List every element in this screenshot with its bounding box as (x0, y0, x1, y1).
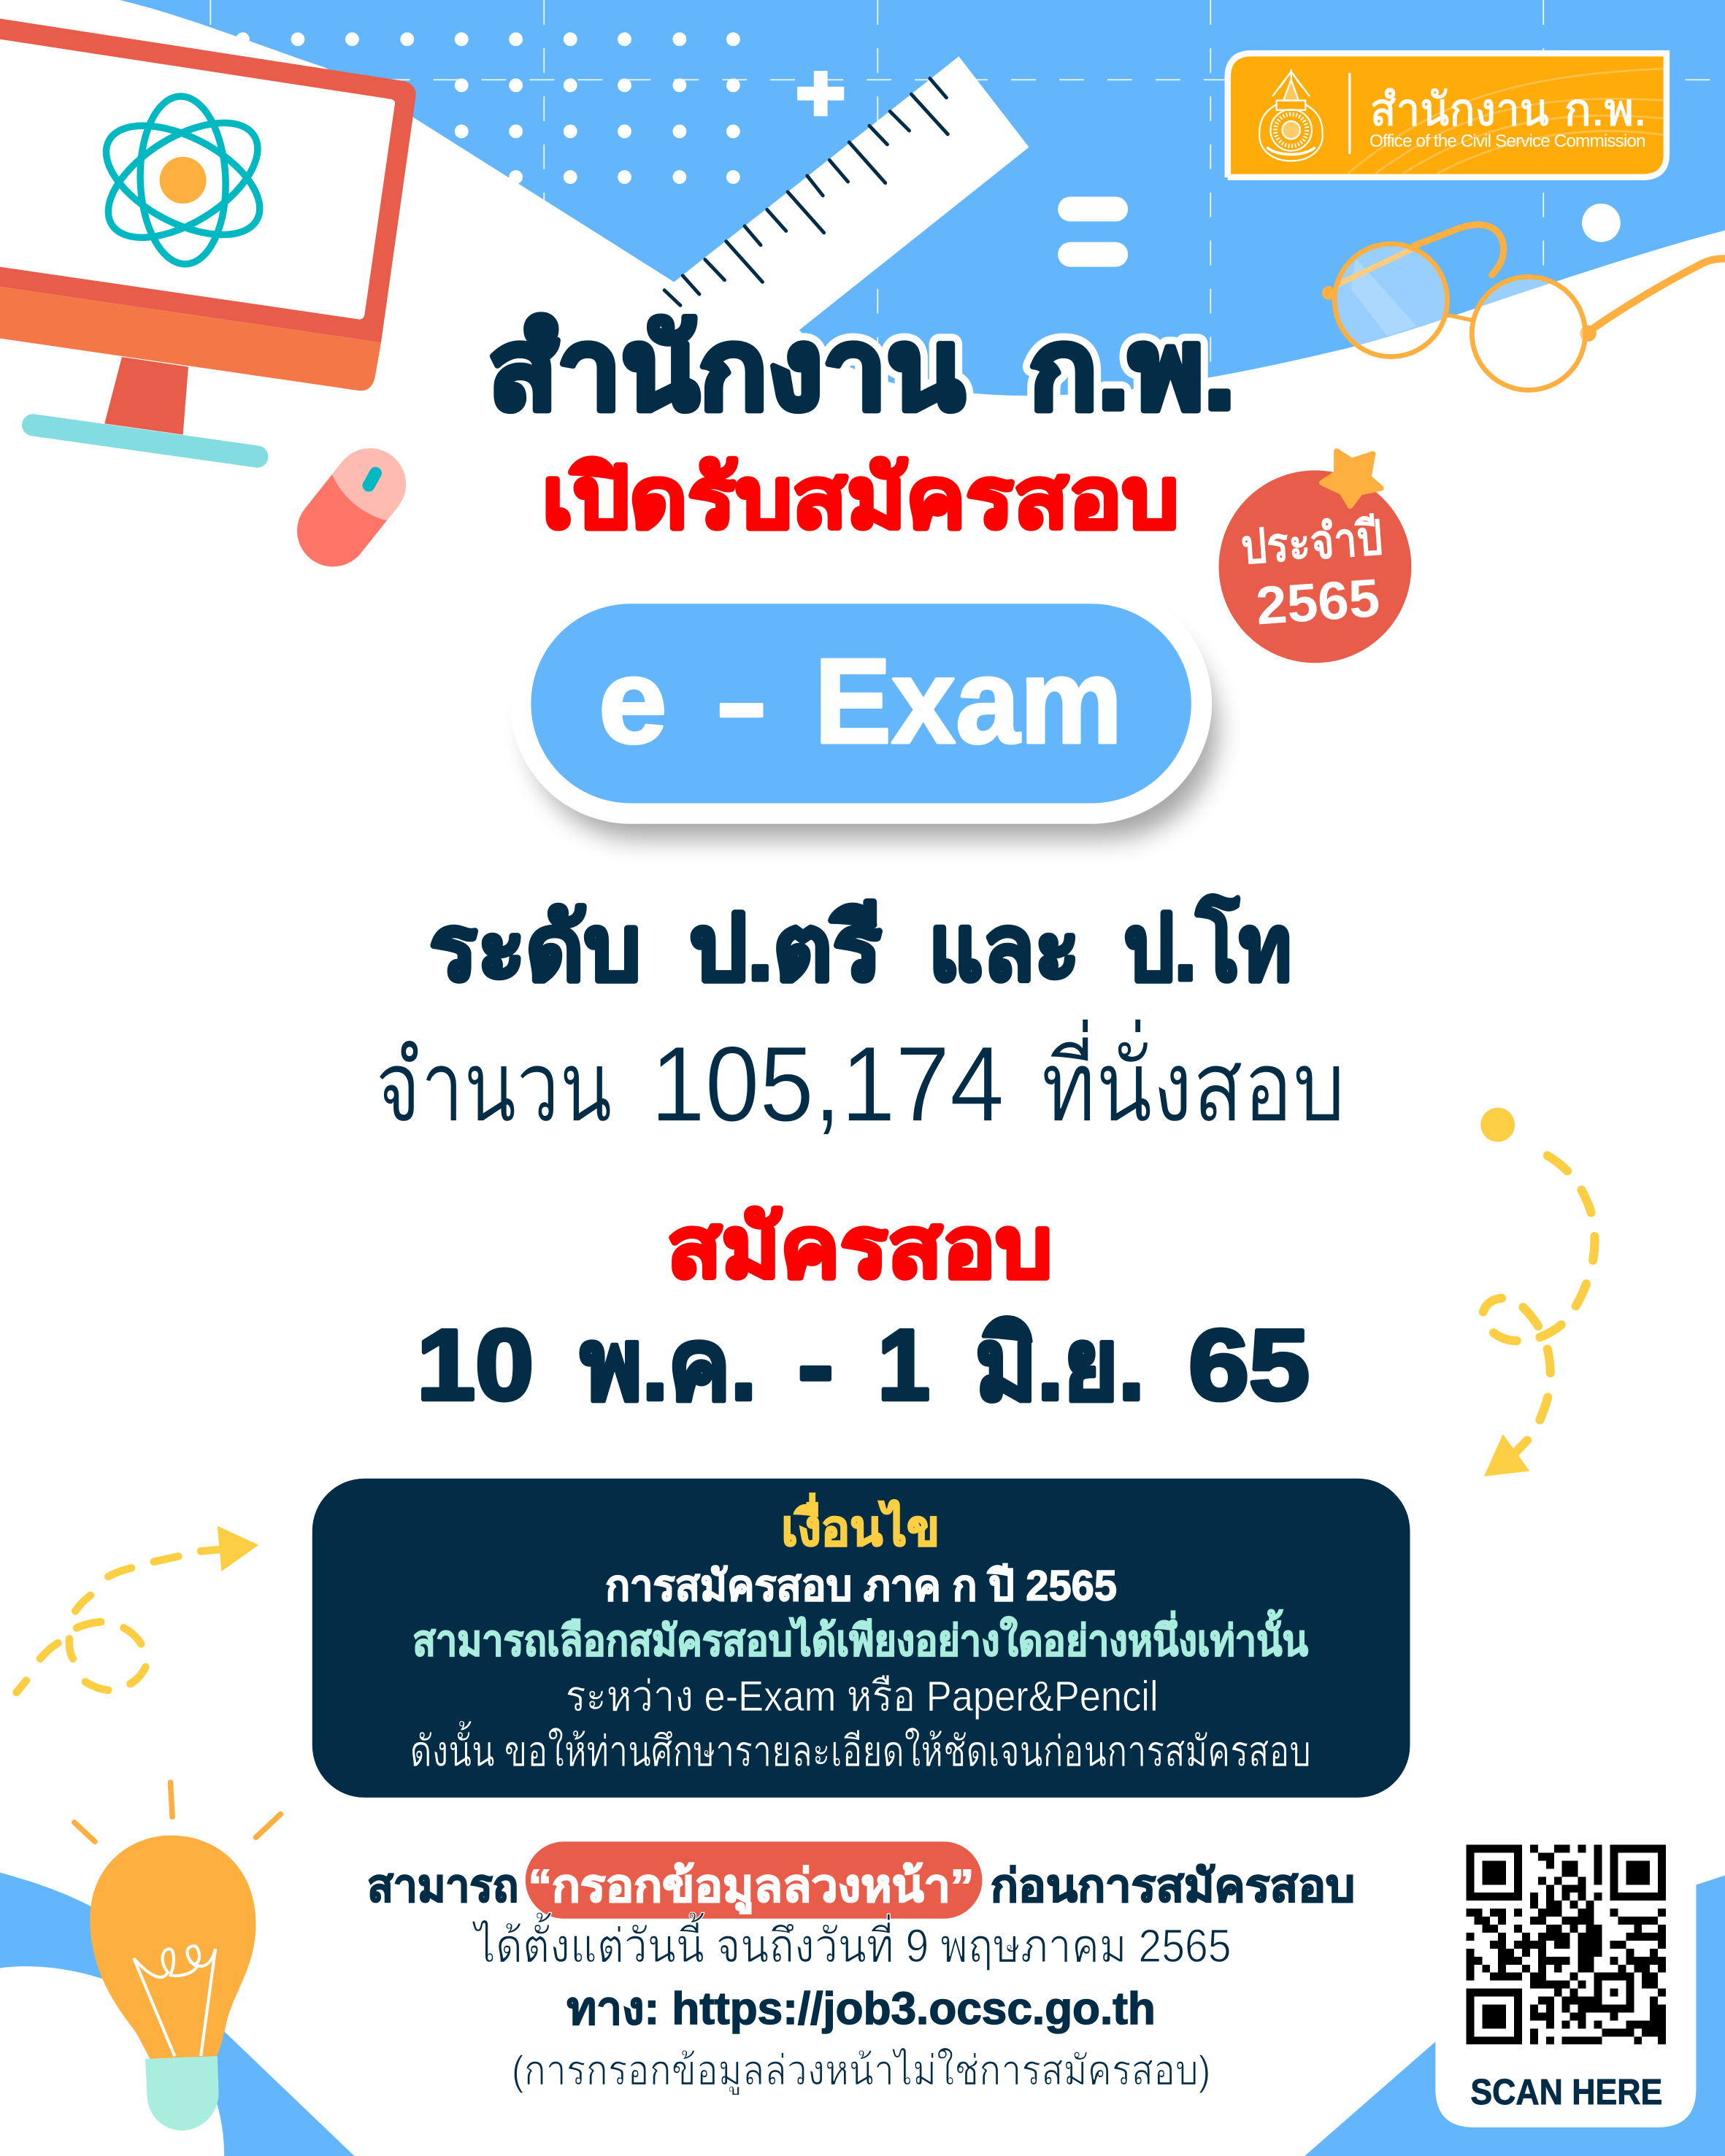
icon: mouse (297, 448, 406, 566)
background: bottom-right blue shape (1304, 1876, 1725, 2156)
icon: white dot (1582, 204, 1621, 242)
icon: atom (89, 95, 277, 266)
text: note: (การกรอกข้อมูลล่วงหน้าไม่ใช่การสมัครสอบ) (512, 2047, 1210, 2095)
subtitle: open for application: เปิดรับสมัครสอบ (542, 450, 1179, 546)
QR code (1466, 1845, 1666, 2044)
icon: ruler ticks (664, 78, 948, 305)
heading: dates: 10 (417, 1309, 534, 1421)
background: top blue shape (120, 0, 1725, 396)
text: pre-fill call to action (367, 1841, 1355, 1919)
text: website: ทาง: https://job3.ocsc.go.th (566, 1984, 1156, 2034)
conditions line 2: สามารถเลือกสมัครสอบได้เพียงอย่างใดอย่างหนึ่งเท่านั้น (412, 1609, 1308, 1665)
text: number of seats: ที่นั่งสอบ (1041, 1019, 1345, 1142)
monitor screen (0, 39, 395, 320)
icon: dashed arrow left (17, 1526, 258, 1693)
text: pre-fill call to action: ก่อนการสมัครสอบ (991, 1861, 1355, 1911)
text: number of seats: 105,174 (650, 1025, 1004, 1144)
heading: dates: - (798, 1309, 834, 1421)
icon: royal seal (1259, 69, 1323, 161)
conditions heading: เงื่อนไข (781, 1493, 940, 1556)
icon: computer monitor (0, 18, 416, 457)
heading: degree levels: ระดับ (429, 897, 641, 1000)
title: ก.พ. (1029, 307, 1235, 433)
heading: degree levels (429, 895, 1291, 1000)
icon: glasses (1322, 225, 1725, 390)
logo English name: Office of the Civil Service Commission (1369, 131, 1646, 151)
heading: degree levels: และ (929, 897, 1080, 1000)
icon: light bulb (74, 1782, 280, 2130)
title: สำนักงาน (488, 307, 964, 433)
icon: plus sign (797, 71, 844, 116)
title (488, 307, 1235, 433)
highlight pill (526, 1841, 982, 1919)
badge: year 2565: 2565 (1254, 567, 1382, 636)
logo Thai name: สำนักงาน (1370, 85, 1549, 136)
icon: equals sign (1058, 196, 1128, 267)
scan here label: SCAN HERE (1470, 2073, 1662, 2112)
heading: dates: 1 (877, 1309, 930, 1421)
monitor chin (0, 287, 381, 390)
heading: degree levels: ป.โท (1124, 895, 1291, 1000)
icon: dashed arrow right (1480, 1108, 1594, 1477)
monitor frame (0, 18, 416, 342)
pill: e-Exam: Exam (815, 634, 1123, 769)
background: bottom-left blue shape (0, 1873, 355, 2156)
logo Thai name (1370, 85, 1647, 136)
conditions line 3: ระหว่าง e-Exam หรือ Paper&Pencil (565, 1673, 1159, 1720)
monitor stand (104, 357, 188, 434)
heading: dates: พ.ค. (580, 1309, 756, 1421)
title: สำนักงาน (488, 307, 964, 433)
heading: dates: มิ.ย. (975, 1309, 1145, 1421)
logo Thai name: ก.พ. (1564, 85, 1647, 136)
text: number of seats (375, 1019, 1345, 1144)
logo: OCSC badge (1228, 53, 1667, 177)
text: pre-fill call to action: “กรอกข้อมูลล่วงหน้า” (529, 1861, 974, 1914)
pill: e-Exam: e (599, 634, 667, 769)
text: pre-fill period: ได้ตั้งแต่วันนี้ จนถึงวันที่ 9 พฤษภาคม 2565 (472, 1912, 1232, 1972)
panel: conditions (312, 1479, 1410, 1798)
monitor base (33, 425, 257, 457)
heading: dates: 65 (1188, 1309, 1310, 1421)
logo divider (1348, 73, 1351, 154)
conditions line 4: ดังนั้น ขอให้ท่านศึกษารายละเอียดให้ชัดเจนก่อนการสมัครสอบ (410, 1721, 1311, 1776)
conditions line 1: การสมัครสอบ ภาค ก ปี 2565 (605, 1562, 1117, 1609)
heading: dates (417, 1309, 1310, 1421)
badge: year 2565 (1219, 451, 1411, 663)
badge: year 2565: ประจำปี (1239, 510, 1384, 574)
heading: apply: สมัครสอบ (667, 1200, 1053, 1295)
heading: degree levels: ป.ตรี (689, 897, 882, 1000)
background: dashed grid lines and dots (210, 0, 1710, 362)
pill: e-Exam: – (718, 634, 765, 769)
text: pre-fill call to action: สามารถ (367, 1861, 518, 1911)
text: number of seats: จำนวน (375, 1031, 612, 1142)
title: ก.พ. (1029, 307, 1235, 433)
panel: QR code card (1435, 1843, 1696, 2128)
pill: e-Exam (510, 583, 1218, 839)
